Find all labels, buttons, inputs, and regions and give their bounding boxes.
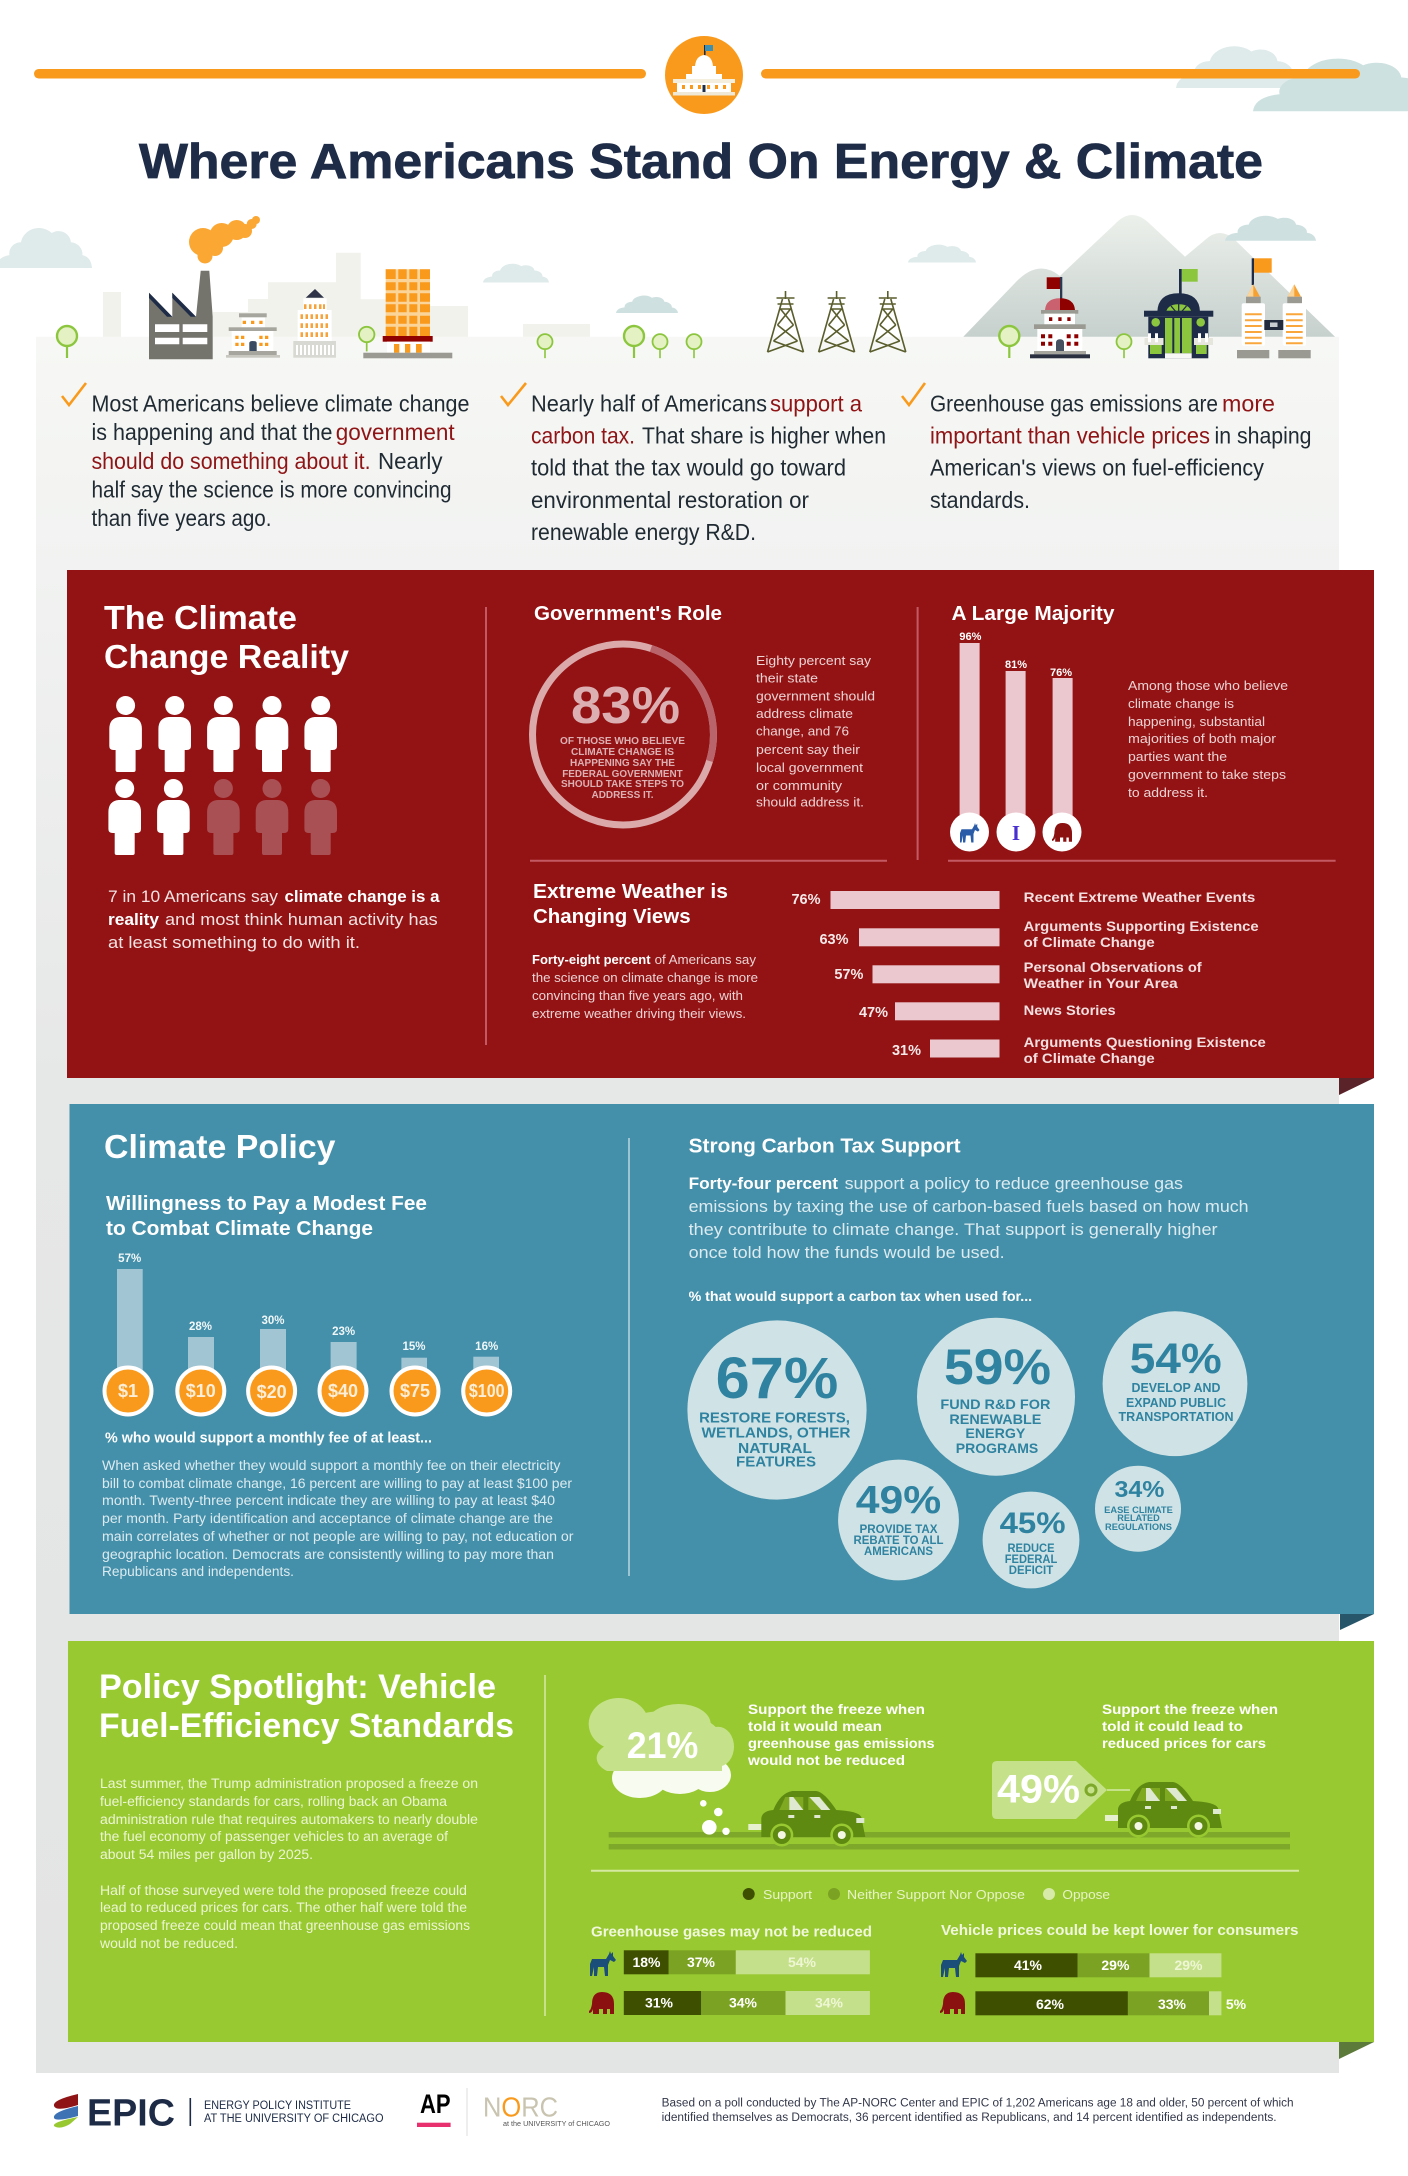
text: support the freeze prices: told it could lead to — [1102, 1718, 1243, 1734]
footnote: identified themselves as Democrats, 36 percent identified as Republicans, and 14 percent identified as independents. — [662, 2112, 1277, 2124]
text: among those who believe: parties want the — [1128, 749, 1227, 764]
footer: norc logo: NORC — [483, 2092, 558, 2123]
header clouds — [1176, 46, 1408, 111]
title: Where Americans Stand On Energy & Climate — [139, 135, 1263, 189]
chart: extreme weather bars: Recent Extreme Weather Events — [1024, 889, 1256, 905]
road — [609, 1832, 1290, 1850]
takeaway 3: American's views on fuel-efficiency — [930, 455, 1264, 481]
heading: the climate change reality: Change Reality — [104, 638, 350, 675]
icon: capitol badge — [665, 36, 743, 114]
text: among those who believe: climate change is — [1128, 696, 1235, 711]
bubble: 34 percent: EASE CLIMATE — [1104, 1505, 1173, 1516]
takeaway 2: told that the tax would go toward — [531, 455, 846, 481]
pylons — [768, 291, 804, 352]
text: among those who believe: happening, substantial — [1128, 714, 1265, 729]
header rule left — [34, 69, 646, 78]
chart: party majority bars — [950, 631, 1082, 852]
text: 7 in 10 americans: at least something to do with it. — [108, 933, 360, 952]
bubble: 45 percent: 45% — [1000, 1507, 1066, 1540]
text: forty-four percent: support a policy to reduce greenhouse gas — [845, 1174, 1183, 1193]
callout: 21 percent cloud — [589, 1698, 734, 1835]
bubble: 54 percent — [1103, 1311, 1247, 1456]
takeaway 1: government — [336, 419, 455, 445]
bubble: 67 percent — [687, 1320, 867, 1500]
text: background paragraphs: lead to reduced prices for cars. The other half were told the — [100, 1900, 467, 1915]
bubble: 49 percent: REBATE TO ALL — [854, 1535, 944, 1547]
factory — [149, 271, 213, 359]
callout: 49 percent price tag — [992, 1761, 1130, 1819]
chart caption: % who would support a monthly fee of at least... — [105, 1431, 432, 1447]
legend — [743, 1888, 1110, 1902]
text: state and local government: should address it. — [756, 795, 864, 810]
bubble: 34 percent — [1095, 1466, 1181, 1552]
smoke — [189, 216, 260, 264]
chart: extreme weather bars: Personal Observations of — [1024, 959, 1202, 975]
chart: monthly fee bars: $1 — [118, 1381, 138, 1401]
twin towers — [1253, 258, 1272, 273]
takeaway 2: environmental restoration or — [531, 487, 809, 513]
heading: policy spotlight — [99, 1668, 514, 1745]
takeaway 1 — [62, 383, 470, 531]
chart: monthly fee bars: 28% — [189, 1321, 212, 1333]
bubble: 67 percent: RESTORE FORESTS, — [699, 1410, 850, 1427]
takeaway 2: Nearly half of Americans — [531, 391, 767, 417]
bubble: 45 percent: FEDERAL — [1005, 1554, 1057, 1566]
text: among those who believe — [1128, 678, 1288, 800]
chart: monthly fee bars: 16% — [475, 1341, 498, 1353]
chart: extreme weather bars: 31% — [892, 1043, 921, 1059]
orange highrise — [386, 269, 430, 336]
chart: extreme weather bars: News Stories — [1024, 1002, 1116, 1018]
pale skyline — [103, 253, 590, 337]
icon: check mark 1 — [62, 383, 86, 405]
bubble: 49 percent — [838, 1460, 959, 1580]
chart: vehicle prices stacked bars: 29% — [1101, 1957, 1130, 1973]
text: forty-eight percent: the science on climate change is more — [532, 970, 758, 985]
chart: greenhouse gases stacked bars — [589, 1925, 872, 2015]
text: background paragraphs: would not be reduced. — [99, 1936, 238, 1951]
bubble: 45 percent: REDUCE — [1008, 1543, 1055, 1555]
caption: carbon tax uses: % that would support a carbon tax when used for... — [689, 1289, 1032, 1304]
subheading: willingness to pay: Willingness to Pay a Modest Fee — [106, 1193, 427, 1215]
takeaway 2: carbon tax. — [531, 423, 635, 449]
chart: greenhouse gases stacked bars: 34% — [729, 1995, 758, 2011]
takeaway 3: standards. — [930, 487, 1030, 513]
takeaway 1: is happening and that the — [92, 419, 332, 445]
bubble: 34 percent: RELATED — [1117, 1513, 1160, 1524]
bubble: 54 percent: 54% — [1130, 1335, 1222, 1383]
takeaway 1: Most Americans believe climate change — [92, 391, 470, 417]
text: state and local government: local government — [756, 760, 863, 775]
text: 7 in 10 americans: reality — [108, 910, 160, 929]
chart: vehicle prices stacked bars: 5% — [1226, 1996, 1247, 2012]
text: state and local government: their state — [756, 671, 818, 686]
chart: extreme weather bars: 63% — [819, 932, 849, 948]
chart: monthly fee bars: 57% — [118, 1253, 141, 1265]
callout: 21 percent cloud: 21% — [627, 1725, 698, 1766]
takeaway 3: more — [1222, 391, 1275, 417]
heading: extreme weather — [533, 881, 728, 928]
text: willingness paragraph — [102, 1458, 574, 1579]
bubble: 67 percent: WETLANDS, OTHER — [702, 1425, 851, 1442]
mountains — [963, 215, 1335, 337]
heading: policy spotlight: Fuel-Efficiency Standards — [99, 1707, 514, 1745]
chart: carbon tax bubbles — [687, 1311, 1247, 1588]
footer: norc logo: at the UNIVERSITY of CHICAGO — [503, 2121, 611, 2128]
subheading: willingness to pay: to Combat Climate Change — [106, 1218, 373, 1240]
footnote: Based on a poll conducted by The AP-NORC Center and EPIC of 1,202 Americans age 18 and older, 50 percent of which — [662, 2098, 1294, 2110]
takeaway 3 — [902, 383, 1312, 513]
icon: check mark 2 — [501, 383, 526, 405]
text: support the freeze emissions: greenhouse gas emissions — [748, 1735, 935, 1751]
takeaway 1: Nearly — [378, 448, 443, 474]
chart: 83 percent ring — [532, 644, 714, 825]
heading: the climate change reality — [104, 599, 350, 675]
text: background paragraphs: Last summer, the Trump administration proposed a freeze on — [100, 1776, 478, 1791]
takeaway 2: support a — [770, 391, 862, 417]
takeaway 2 — [501, 383, 886, 545]
chart: monthly fee bars: $40 — [328, 1381, 358, 1401]
takeaway 2: That share is higher when — [642, 423, 886, 449]
text: state and local government: percent say their — [756, 742, 861, 757]
chart: party majority bars: 96% — [959, 631, 982, 643]
text: forty-four percent: once told how the funds would be used. — [689, 1243, 1005, 1262]
heading: policy spotlight: Policy Spotlight: Vehicle — [99, 1668, 496, 1706]
heading: the climate change reality: The Climate — [104, 599, 297, 636]
text: support the freeze emissions — [747, 1701, 935, 1768]
heading: extreme weather: Changing Views — [533, 906, 691, 928]
background clouds — [0, 228, 976, 313]
icon: car right — [1105, 1782, 1222, 1838]
bubble: 54 percent: EXPAND PUBLIC — [1126, 1396, 1226, 1410]
callout: 49 percent price tag: 49% — [997, 1768, 1080, 1812]
takeaway 1: should do something about it. — [92, 448, 370, 474]
takeaway 3: Greenhouse gas emissions are — [930, 391, 1218, 417]
text: 7 in 10 americans: and most think human activity has — [165, 910, 438, 929]
panel: the climate change reality — [67, 570, 1374, 1095]
bubble: 67 percent: FEATURES — [736, 1454, 816, 1471]
icon: car left — [748, 1791, 865, 1846]
chart: greenhouse gases stacked bars: Greenhouse gases may not be reduced — [591, 1925, 872, 1941]
chart: monthly fee bars: 15% — [402, 1341, 426, 1353]
footer: ap logo: AP — [420, 2089, 451, 2119]
panel: climate policy — [70, 1104, 1374, 1630]
chart: 83 percent ring: FEDERAL GOVERNMENT — [562, 769, 683, 780]
bubble: 49 percent: AMERICANS — [864, 1546, 933, 1558]
chart: greenhouse gases stacked bars: 54% — [788, 1954, 817, 1970]
heading: a large majority: A Large Majority — [952, 603, 1115, 625]
text: forty-eight percent: of Americans say — [655, 952, 756, 967]
text: state and local government: or community — [756, 778, 843, 793]
text: 7 in 10 americans: climate change is a — [284, 887, 440, 906]
domed building — [1047, 277, 1061, 289]
text: background paragraphs: Half of those surveyed were told the proposed freeze could — [100, 1883, 467, 1898]
chart: greenhouse gases stacked bars: 18% — [632, 1954, 661, 1970]
text: forty-four percent: they contribute to climate change. That support is generally higher — [689, 1220, 1218, 1239]
text: forty-eight percent: convincing than five years ago, with — [532, 988, 743, 1003]
bubble: 59 percent — [917, 1318, 1075, 1476]
chart: monthly fee bars: $20 — [257, 1382, 287, 1402]
heading: government's role: Government's Role — [534, 603, 722, 625]
cloud over mountains — [1225, 216, 1316, 241]
chart: extreme weather bars: 57% — [834, 967, 863, 983]
text: willingness paragraph: month. Twenty-three percent indicate they are willing to pay at least $40 — [102, 1493, 555, 1508]
chart: greenhouse gases stacked bars: 37% — [687, 1954, 716, 1970]
text: 7 in 10 americans — [108, 887, 440, 952]
takeaway 3: important than vehicle prices — [930, 423, 1210, 449]
pictogram: 7 in 10 people — [108, 696, 337, 855]
bubble: 67 percent: 67% — [716, 1346, 838, 1411]
bubble: 45 percent — [983, 1492, 1079, 1588]
chart: monthly fee bars: 23% — [332, 1326, 355, 1338]
chart: extreme weather bars — [791, 889, 1266, 1066]
bubble: 54 percent: TRANSPORTATION — [1118, 1410, 1234, 1424]
chart: extreme weather bars: of Climate Change — [1024, 1050, 1155, 1066]
chart: vehicle prices stacked bars: 33% — [1158, 1996, 1187, 2012]
takeaway 2: renewable energy R&D. — [531, 519, 756, 545]
text: among those who believe: Among those who believe — [1128, 678, 1288, 693]
bubble: 49 percent: 49% — [856, 1479, 941, 1522]
trees — [57, 326, 77, 358]
text: forty-four percent: Forty-four percent — [689, 1174, 838, 1193]
footnote — [662, 2098, 1294, 2124]
chart: monthly fee bars: 30% — [261, 1315, 285, 1327]
icon: check mark 3 — [902, 383, 925, 405]
text: support the freeze emissions: would not be reduced — [747, 1752, 905, 1768]
bubble: 59 percent: PROGRAMS — [956, 1440, 1038, 1456]
text: background paragraphs: proposed freeze could mean that greenhouse gas emissions — [100, 1918, 470, 1933]
text: background paragraphs — [99, 1776, 478, 1951]
text: forty-eight percent: extreme weather driving their views. — [532, 1006, 746, 1021]
text: background paragraphs: the fuel economy of passenger vehicles to an average of — [100, 1829, 448, 1844]
takeaway 1: than five years ago. — [92, 505, 272, 531]
text: support the freeze prices: Support the freeze when — [1102, 1701, 1278, 1717]
chart: extreme weather bars: 47% — [859, 1005, 888, 1021]
chart: monthly fee bars — [104, 1253, 510, 1414]
chart: monthly fee bars: $100 — [469, 1381, 505, 1401]
takeaway 3: in shaping — [1214, 423, 1312, 449]
chart: monthly fee bars: $10 — [186, 1381, 216, 1401]
heading: extreme weather: Extreme Weather is — [533, 881, 728, 903]
icon: elephant — [1052, 823, 1072, 842]
green building — [1182, 269, 1198, 282]
bubble: 54 percent: DEVELOP AND — [1132, 1381, 1220, 1395]
text: support the freeze prices — [1102, 1701, 1278, 1751]
building tower — [306, 289, 324, 298]
background panel — [36, 337, 1339, 2073]
text: among those who believe: majorities of both major — [1128, 731, 1277, 746]
illustration: skyline and landscape — [0, 215, 1335, 359]
text: forty-four percent — [689, 1174, 1249, 1262]
chart: extreme weather bars: Arguments Questioning Existence — [1024, 1034, 1266, 1050]
text: willingness paragraph: per month. Party identification and acceptance of climate change are the — [102, 1511, 553, 1526]
chart: extreme weather bars: Arguments Supporting Existence — [1024, 918, 1259, 934]
text: state and local government: address climate — [756, 706, 853, 721]
text: state and local government — [756, 653, 875, 810]
chart: monthly fee bars: $75 — [400, 1381, 430, 1401]
text: state and local government: change, and 76 — [756, 724, 849, 739]
text: willingness paragraph: Republicans and independents. — [102, 1564, 294, 1579]
text: willingness paragraph: When asked whether they would support a monthly fee on their electricity — [102, 1458, 561, 1473]
subheading: willingness to pay — [106, 1193, 427, 1240]
text: background paragraphs: administration rule that requires automakers to nearly double — [100, 1812, 478, 1827]
chart: extreme weather bars: of Climate Change — [1024, 934, 1155, 950]
chart: greenhouse gases stacked bars: 31% — [645, 1995, 674, 2011]
text: forty-four percent: emissions by taxing the use of carbon-based fuels based on how much — [689, 1197, 1249, 1216]
bubble: 59 percent: ENERGY — [965, 1425, 1026, 1441]
chart: party majority bars: 81% — [1005, 659, 1027, 671]
footer: ap logo — [417, 2089, 451, 2127]
text: background paragraphs: fuel-efficiency standards for cars, rolling back an Obama — [100, 1794, 447, 1809]
chart: greenhouse gases stacked bars: 34% — [815, 1995, 844, 2011]
text: support the freeze emissions: told it would mean — [748, 1718, 882, 1734]
footer: epic logo: EPIC — [87, 2093, 175, 2135]
takeaway 1: half say the science is more convincing — [92, 476, 452, 502]
text: support the freeze prices: reduced prices for cars — [1102, 1735, 1266, 1751]
chart: vehicle prices stacked bars: Vehicle prices could be kept lower for consumers — [941, 1923, 1298, 1939]
legend: Neither Support Nor Oppose — [847, 1888, 1025, 1902]
bubble: 45 percent: DEFICIT — [1009, 1565, 1053, 1577]
bubble: 34 percent: 34% — [1114, 1476, 1164, 1502]
footer: epic logo — [54, 2093, 384, 2135]
text: background paragraphs: about 54 miles per gallon by 2025. — [100, 1847, 313, 1862]
bubble: 59 percent: 59% — [944, 1339, 1051, 1395]
heading: climate policy: Climate Policy — [104, 1128, 336, 1165]
footer: epic logo: ENERGY POLICY INSTITUTE — [204, 2100, 351, 2112]
bubble: 49 percent: PROVIDE TAX — [860, 1524, 938, 1536]
bubble: 59 percent: FUND R&D FOR — [940, 1396, 1050, 1412]
chart: vehicle prices stacked bars: 29% — [1174, 1957, 1203, 1973]
legend: Support — [763, 1888, 813, 1902]
building small — [242, 317, 265, 327]
chart: 83 percent ring: HAPPENING SAY THE — [570, 758, 675, 769]
header rule right — [761, 69, 1360, 78]
text: among those who believe: to address it. — [1128, 785, 1208, 800]
text: among those who believe: government to take steps — [1128, 767, 1287, 782]
text: state and local government: government should — [756, 689, 875, 704]
footer: epic logo: AT THE UNIVERSITY OF CHICAGO — [204, 2113, 384, 2125]
text: state and local government: Eighty percent say — [756, 653, 872, 668]
chart: vehicle prices stacked bars — [940, 1923, 1298, 2015]
bubble: 34 percent: REGULATIONS — [1105, 1522, 1172, 1533]
chart: vehicle prices stacked bars: 62% — [1036, 1996, 1065, 2012]
bubble: 67 percent: NATURAL — [738, 1440, 812, 1457]
chart: 83 percent ring: SHOULD TAKE STEPS TO — [561, 779, 684, 790]
bubble: 59 percent: RENEWABLE — [949, 1411, 1041, 1427]
chart: 83 percent ring: OF THOSE WHO BELIEVE — [560, 736, 685, 747]
text: willingness paragraph: main correlates of whether or not people are willing to pay, not education or — [102, 1529, 574, 1544]
text: support the freeze emissions: Support the freeze when — [748, 1701, 925, 1717]
text: forty-eight percent — [532, 952, 758, 1021]
chart: extreme weather bars: 76% — [791, 892, 821, 908]
chart: vehicle prices stacked bars: 41% — [1014, 1957, 1043, 1973]
footer: norc logo — [483, 2092, 611, 2128]
chart: party majority bars: 76% — [1050, 667, 1072, 679]
heading: strong carbon tax support: Strong Carbon Tax Support — [689, 1136, 961, 1158]
legend: Oppose — [1062, 1888, 1110, 1902]
chart: extreme weather bars: Weather in Your Area — [1024, 975, 1178, 991]
panel: policy spotlight — [68, 1641, 1374, 2059]
icon: independent: I — [1012, 821, 1020, 845]
chart: 83 percent ring: 83% — [571, 677, 680, 735]
text: willingness paragraph: geographic location. Democrats are consistently willing to pay more than — [102, 1547, 554, 1562]
text: forty-eight percent: Forty-eight percent — [532, 952, 651, 967]
text: 7 in 10 americans: 7 in 10 Americans say — [108, 887, 279, 906]
text: willingness paragraph: bill to combat climate change, 16 percent are willing to pay at least $100 per — [102, 1476, 573, 1491]
chart: 83 percent ring: CLIMATE CHANGE IS — [571, 747, 674, 758]
icon: donkey — [960, 823, 980, 842]
chart: 83 percent ring: ADDRESS IT. — [592, 790, 654, 801]
